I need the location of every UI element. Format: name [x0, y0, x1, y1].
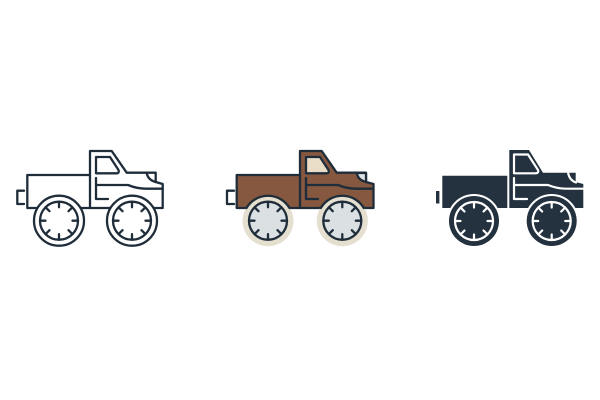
- icon: solid truck: [436, 150, 584, 248]
- front and rear wheels: [447, 194, 579, 248]
- bed and cab silhouette: [442, 150, 583, 208]
- rear bumper: [17, 191, 24, 204]
- truck body: [237, 151, 374, 208]
- icon: outline truck: [17, 151, 163, 246]
- icon: coloured truck: [227, 151, 374, 246]
- headlight: [357, 173, 366, 182]
- truck body outline: [27, 151, 163, 208]
- cab window: [306, 157, 329, 173]
- window and trim lines: [514, 154, 584, 199]
- front and rear wheels: [242, 195, 294, 246]
- rear bumper: [227, 191, 234, 204]
- front and rear wheels: [34, 196, 157, 246]
- cab window: [96, 157, 119, 173]
- rear bumper: [436, 191, 439, 204]
- door and trim lines: [300, 175, 374, 208]
- door and trim lines: [96, 173, 163, 199]
